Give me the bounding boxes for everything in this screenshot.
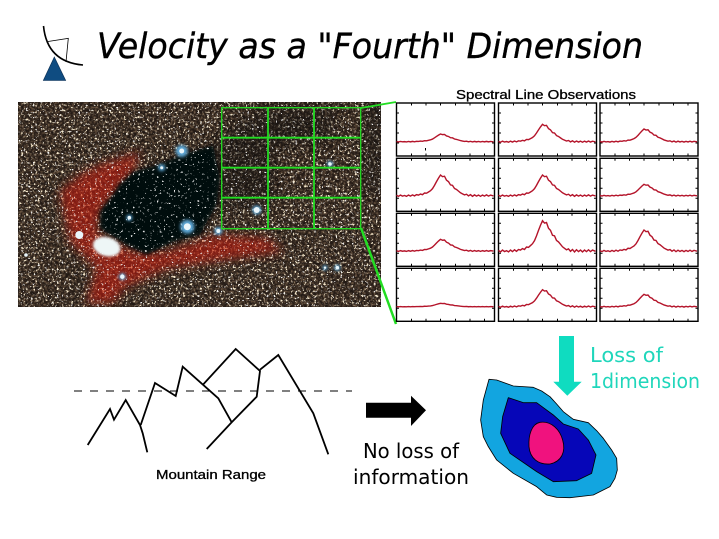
icon: radio telescope dish [43, 26, 83, 80]
spectral line chart grid [396, 103, 698, 321]
bright field stars [18, 102, 381, 307]
spectrum row 3 [396, 213, 698, 266]
text: loss of 1 dimension: 1dimension [590, 369, 700, 393]
mountain range diagram [74, 349, 352, 454]
title: Velocity as a "Fourth" Dimension [97, 27, 643, 67]
text: no loss of information [353, 439, 469, 489]
bright stars [24, 145, 340, 280]
red emission nebula glow [60, 152, 283, 303]
spectrum row 1 [396, 103, 698, 156]
arrow: black right arrow [366, 396, 426, 426]
label: mountain range: Mountain Range [156, 468, 266, 482]
contour map: velocity-integrated emission [481, 379, 617, 498]
sparse stars over cloud [18, 102, 381, 307]
spectrum row 4 [396, 268, 698, 321]
text: no loss of information: No loss of [363, 439, 460, 463]
inner contour [529, 422, 564, 464]
outer contour [481, 379, 617, 498]
green selection grid over photo [222, 102, 396, 324]
arrow: cyan down arrow [553, 336, 582, 396]
dim field stars [18, 102, 381, 307]
text: loss of 1 dimension: Loss of [590, 343, 664, 367]
text: loss of 1 dimension [590, 343, 700, 393]
spectrum row 2 [396, 158, 698, 211]
text: no loss of information: information [353, 465, 469, 489]
middle contour [501, 398, 596, 482]
heading: spectral line observations: Spectral Line Observations [456, 87, 637, 102]
nebula photograph [18, 98, 383, 307]
red tint on nebula stars [60, 152, 283, 303]
dark dust cloud [100, 98, 383, 255]
